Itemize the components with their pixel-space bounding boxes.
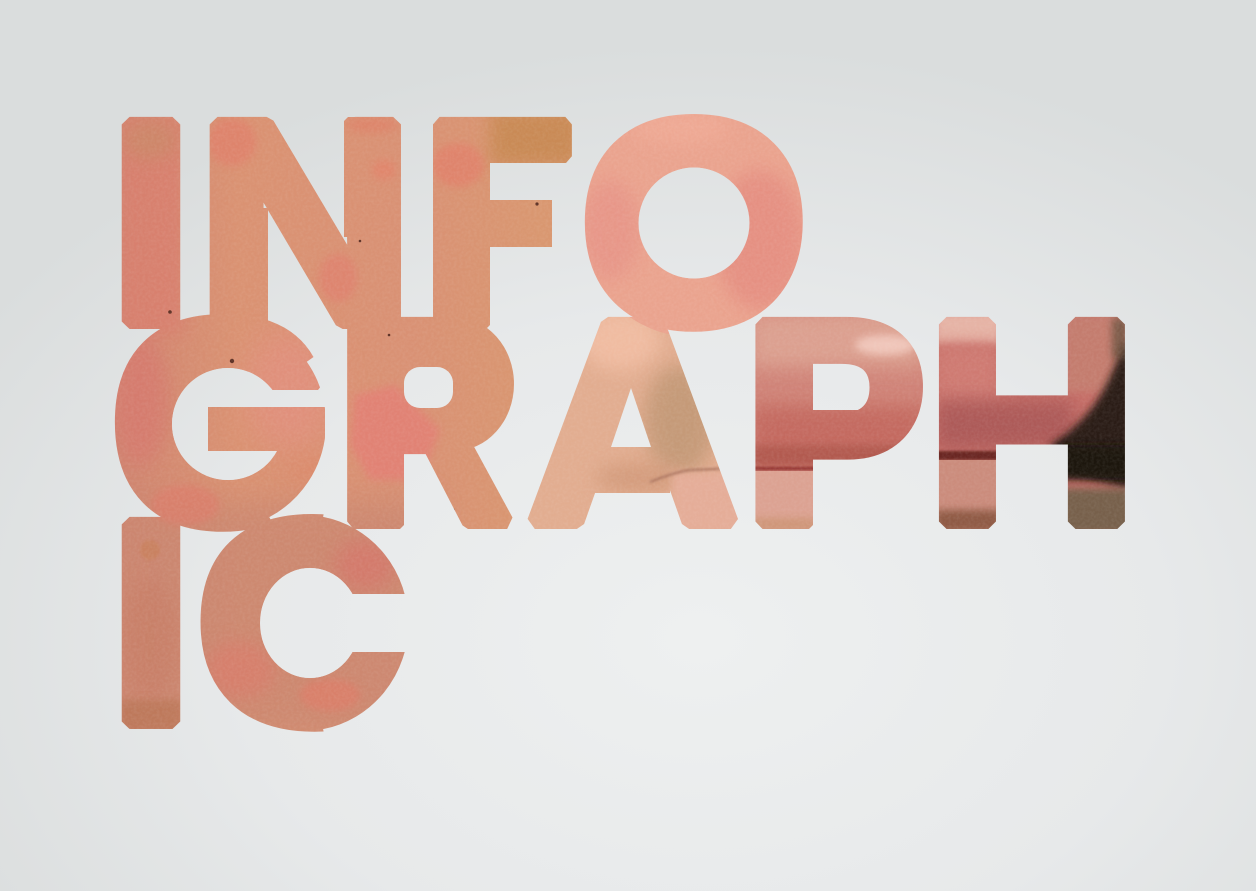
- O: pale pink skin: [580, 109, 808, 337]
- fine grain: [100, 100, 1140, 740]
- P: upper lip: [750, 312, 925, 534]
- H: lip corner and dark crease: [935, 312, 1132, 534]
- title: INFOGRAPHIC filled with skin texture: [100, 100, 1140, 740]
- A: facial skin: [520, 310, 745, 534]
- skin tone variations: [110, 110, 580, 740]
- moles: [168, 202, 539, 512]
